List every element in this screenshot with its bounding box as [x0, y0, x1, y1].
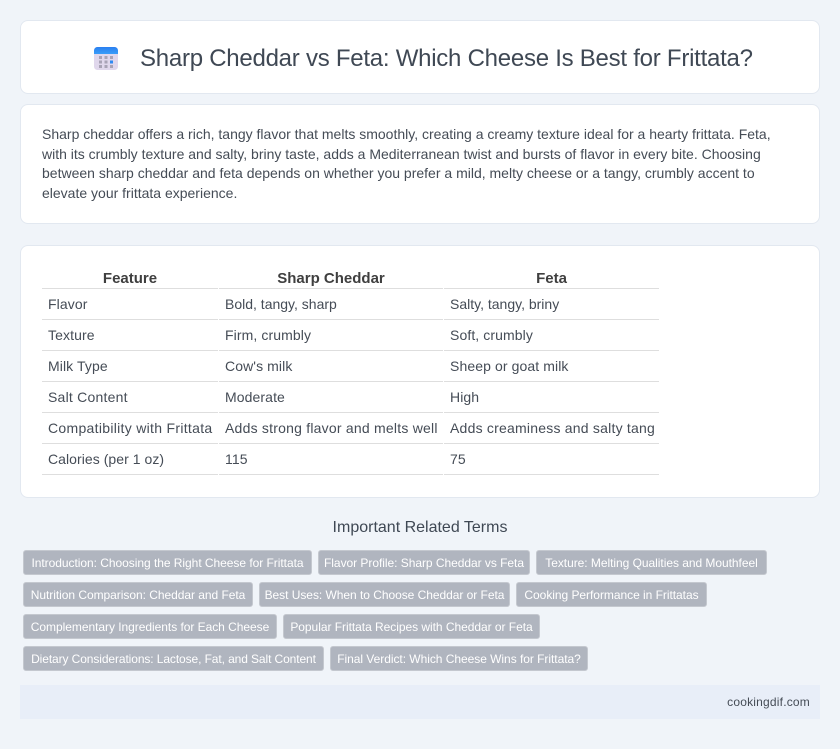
tag: Texture: Melting Qualities and Mouthfeel	[545, 556, 758, 570]
intro paragraph: with its crumbly texture and salty, briny taste, adds a Mediterranean twist and bursts of flavor in every bite. Choosing	[42, 146, 761, 162]
row: salt content: High	[450, 389, 479, 405]
footer source: cookingdif.com	[727, 695, 810, 709]
related terms tags	[23, 550, 767, 671]
tag	[23, 550, 312, 575]
tag: Flavor Profile: Sharp Cheddar vs Feta	[324, 556, 524, 570]
table header	[42, 270, 659, 289]
comparison table	[42, 270, 659, 475]
row: texture	[42, 327, 659, 351]
row: salt content: Moderate	[225, 389, 285, 405]
row: milk type: Milk Type	[48, 358, 108, 374]
row: texture: Soft, crumbly	[450, 327, 533, 343]
row: texture: Firm, crumbly	[225, 327, 311, 343]
row: flavor: Bold, tangy, sharp	[225, 296, 337, 312]
row: flavor: Flavor	[48, 296, 88, 312]
tag	[259, 582, 510, 607]
intro paragraph: Sharp cheddar offers a rich, tangy flavor that melts smoothly, creating a creamy texture ideal for a hearty frittata. Feta,	[42, 126, 771, 142]
intro paragraph: between sharp cheddar and feta depends on whether you prefer a mild, melty cheese or a tangy, crumbly accent to	[42, 165, 755, 181]
row: flavor	[42, 296, 659, 320]
row: compatibility: Adds creaminess and salty tang	[450, 420, 655, 436]
row: flavor: Salty, tangy, briny	[450, 296, 559, 312]
icon: calendar	[94, 47, 118, 70]
related terms heading: Important Related Terms	[333, 519, 507, 536]
table header: Sharp Cheddar	[277, 270, 385, 287]
row: calories: 75	[450, 451, 466, 467]
tag: Nutrition Comparison: Cheddar and Feta	[31, 588, 245, 602]
tag: Final Verdict: Which Cheese Wins for Frittata?	[337, 652, 581, 666]
intro text panel	[20, 104, 820, 224]
footer	[20, 685, 820, 719]
tag: Dietary Considerations: Lactose, Fat, and Salt Content	[31, 652, 316, 666]
tag	[516, 582, 707, 607]
tag: Complementary Ingredients for Each Cheese	[31, 620, 269, 634]
comparison table panel	[20, 245, 820, 498]
table header: Feta	[536, 270, 567, 287]
tag	[23, 614, 277, 639]
row: compatibility	[42, 420, 659, 444]
row: calories	[42, 451, 659, 475]
tag: Popular Frittata Recipes with Cheddar or Feta	[290, 620, 533, 634]
row: calories: 115	[225, 451, 248, 467]
tag	[330, 646, 588, 671]
row: texture: Texture	[48, 327, 95, 343]
row: milk type: Cow's milk	[225, 358, 292, 374]
row: salt content	[42, 389, 659, 413]
row: compatibility: Compatibility with Frittata	[48, 420, 212, 436]
tag	[536, 550, 767, 575]
tag	[23, 646, 324, 671]
title card	[20, 20, 820, 94]
tag	[283, 614, 540, 639]
intro paragraph	[42, 126, 771, 201]
tag: Best Uses: When to Choose Cheddar or Feta	[265, 588, 504, 602]
tag	[318, 550, 530, 575]
tag: Introduction: Choosing the Right Cheese for Frittata	[31, 556, 304, 570]
row: salt content: Salt Content	[48, 389, 128, 405]
title: Sharp Cheddar vs Feta: Which Cheese Is Best for Frittata?	[140, 45, 753, 72]
table header: Feature	[103, 270, 157, 287]
intro paragraph: elevate your frittata experience.	[42, 185, 237, 201]
row: calories: Calories (per 1 oz)	[48, 451, 164, 467]
row: compatibility: Adds strong flavor and melts well	[225, 420, 438, 436]
row: milk type	[42, 358, 659, 382]
row: milk type: Sheep or goat milk	[450, 358, 569, 374]
tag: Cooking Performance in Frittatas	[524, 588, 699, 602]
tag	[23, 582, 253, 607]
